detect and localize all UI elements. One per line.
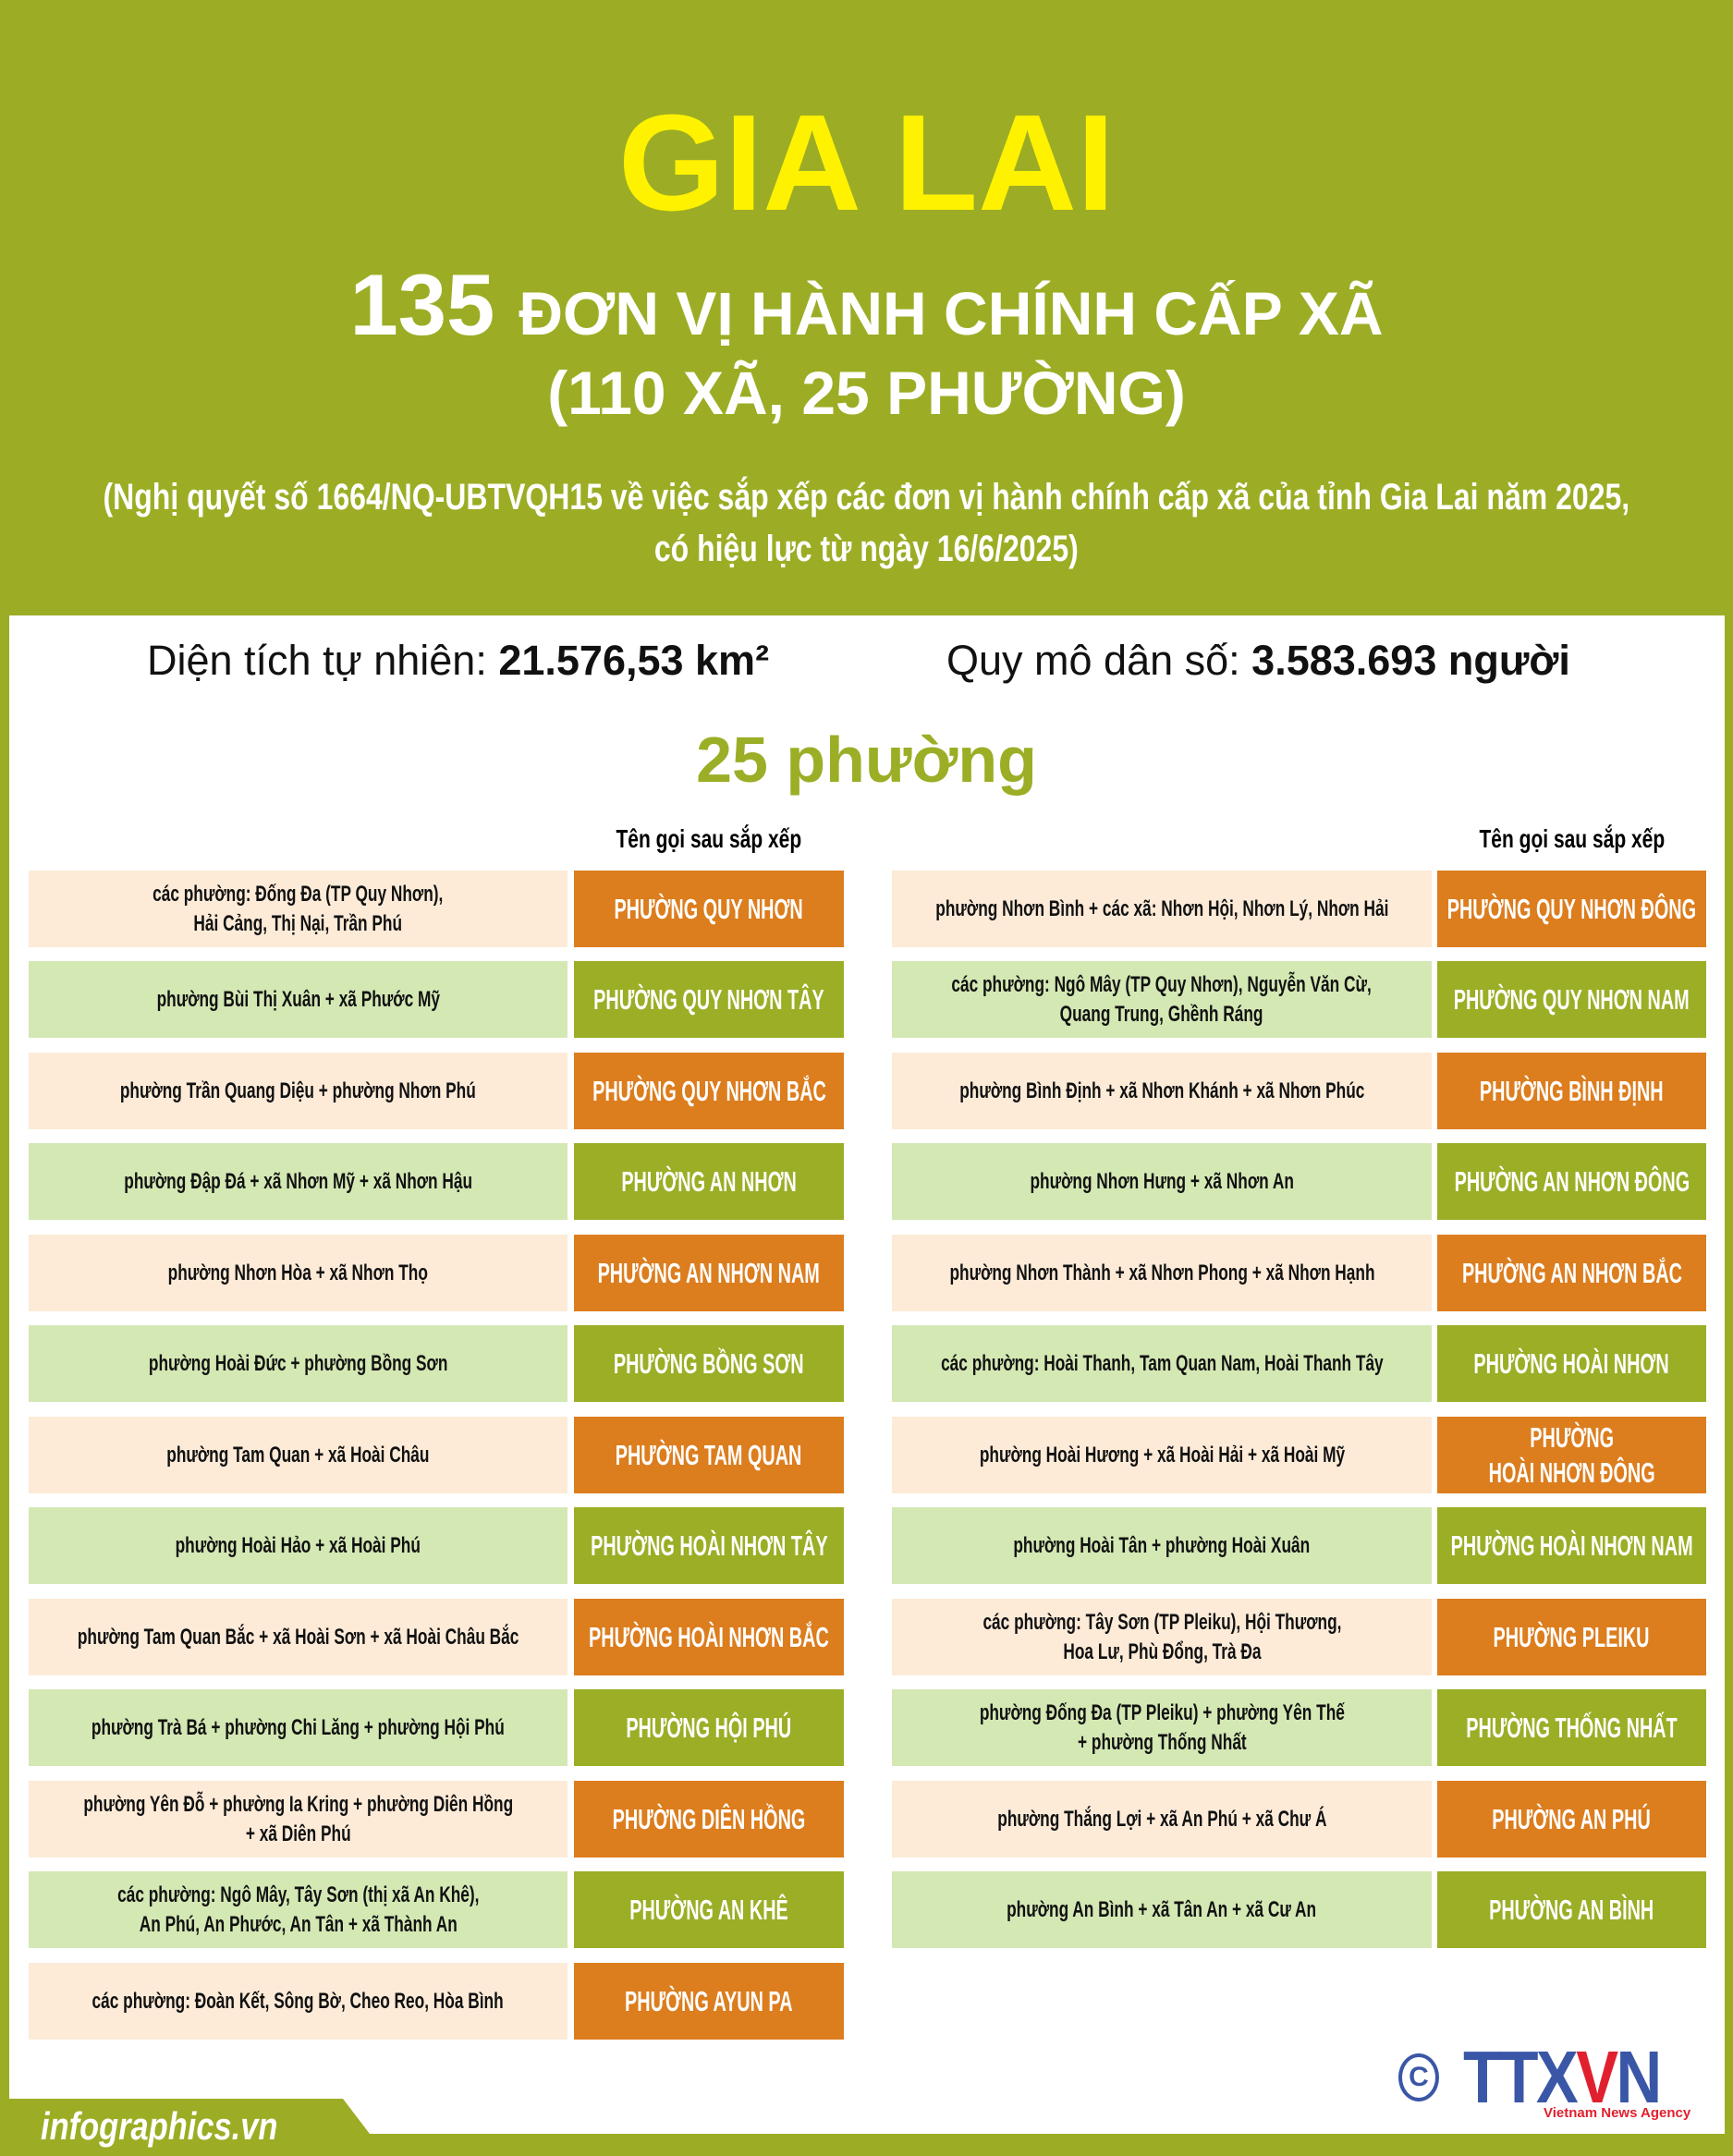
row L11 [29,1781,844,1858]
row R5: phường Nhơn Thành + xã Nhơn Phong + xã Nhơn Hạnh [949,1261,1374,1285]
row L7: PHƯỜNG TAM QUAN [616,1438,802,1471]
white panel [9,615,1725,2134]
row R10 [892,1689,1706,1766]
row L11: + xã Diên Phú [246,1821,350,1846]
subtitle: 135 units: 135 ĐƠN VỊ HÀNH CHÍNH CẤP XÃ [349,256,1384,353]
row L8 [29,1507,844,1584]
row R8: PHƯỜNG HOÀI NHƠN NAM [1451,1529,1692,1562]
row R1: PHƯỜNG QUY NHƠN ĐÔNG [1447,893,1696,924]
column header right: Tên gọi sau sắp xếp [1479,824,1665,853]
row L10: PHƯỜNG HỘI PHÚ [627,1711,791,1743]
stat: area: Diện tích tự nhiên: 21.576,53 km² [147,637,769,684]
row R12: PHƯỜNG AN BÌNH [1489,1893,1654,1926]
row L2: PHƯỜNG QUY NHƠN TÂY [593,983,824,1015]
row L1: PHƯỜNG QUY NHƠN [615,893,803,924]
row R11: phường Thắng Lợi + xã An Phú + xã Chư Á [997,1806,1326,1832]
row R9 [892,1599,1706,1675]
row L1: Hải Cảng, Thị Nại, Trần Phú [194,911,402,935]
row L12: An Phú, An Phước, An Tân + xã Thành An [139,1911,458,1937]
row R2: các phường: Ngô Mây (TP Quy Nhơn), Nguyễn Văn Cừ, [952,972,1372,996]
row L12 [29,1871,844,1948]
row L6 [29,1325,844,1402]
row R11: PHƯỜNG AN PHÚ [1493,1802,1651,1835]
resolution note [104,477,1629,569]
row R3: PHƯỜNG BÌNH ĐỊNH [1480,1074,1664,1107]
column header left: Tên gọi sau sắp xếp [616,824,801,853]
resolution note: có hiệu lực từ ngày 16/6/2025) [654,529,1079,569]
row R9: Hoa Lư, Phù Đổng, Trà Đa [1063,1639,1261,1663]
table: left column [29,871,844,2040]
row L6: phường Hoài Đức + phường Bồng Sơn [149,1351,447,1375]
row L1: các phường: Đống Đa (TP Quy Nhơn), [153,882,444,906]
row L9: phường Tam Quan Bắc + xã Hoài Sơn + xã Hoài Châu Bắc [78,1625,519,1649]
row L2: phường Bùi Thị Xuân + xã Phước Mỹ [156,987,440,1011]
row R7: PHƯỜNG [1530,1421,1614,1453]
heading: 25 phường: 25 phường [696,724,1037,796]
row L12: các phường: Ngô Mây, Tây Sơn (thị xã An Khê), [117,1882,479,1907]
title: GIA LAI [618,87,1115,239]
row L3: phường Trần Quang Diệu + phường Nhơn Phú [120,1078,476,1103]
row L4: phường Đập Đá + xã Nhơn Mỹ + xã Nhơn Hậu [124,1168,472,1194]
row R5: PHƯỜNG AN NHƠN BẮC [1461,1257,1682,1288]
row L2 [29,961,844,1038]
row L5: phường Nhơn Hòa + xã Nhơn Thọ [168,1261,428,1285]
row R10: PHƯỜNG THỐNG NHẤT [1466,1711,1678,1743]
row R3 [892,1053,1706,1129]
row L7: phường Tam Quan + xã Hoài Châu [166,1442,430,1468]
logo text: TTXVN [1463,2036,1660,2118]
row R9: PHƯỜNG PLEIKU [1494,1621,1650,1652]
row L13: PHƯỜNG AYUN PA [625,1985,793,2016]
row L13 [29,1963,844,2040]
row L10: phường Trà Bá + phường Chi Lăng + phường Hội Phú [92,1715,505,1739]
row L3 [29,1053,844,1129]
footer tab [9,2099,370,2134]
row R4: phường Nhơn Hưng + xã Nhơn An [1030,1168,1294,1194]
row L4 [29,1143,844,1220]
icon: copyright: C [1409,2062,1429,2092]
row L4: PHƯỜNG AN NHƠN [621,1164,797,1198]
row R9: các phường: Tây Sơn (TP Pleiku), Hội Thương, [982,1610,1341,1634]
row R6 [892,1325,1706,1402]
row R12 [892,1871,1706,1948]
row R8: phường Hoài Tân + phường Hoài Xuân [1014,1532,1310,1558]
row R11 [892,1781,1706,1858]
row L9 [29,1599,844,1675]
row R1: phường Nhơn Bình + các xã: Nhơn Hội, Nhơn Lý, Nhơn Hải [935,896,1388,920]
row R4 [892,1143,1706,1220]
row R10: + phường Thống Nhất [1078,1730,1246,1754]
row L11: PHƯỜNG DIÊN HỒNG [613,1802,805,1835]
row R12: phường An Bình + xã Tân An + xã Cư An [1007,1896,1316,1922]
row R2: Quang Trung, Ghềnh Ráng [1060,1002,1263,1026]
row R10: phường Đống Đa (TP Pleiku) + phường Yên Thế [979,1700,1345,1724]
row L1 [29,871,844,947]
row R1 [892,871,1706,947]
subtitle: 110 xã 25 phường: (110 XÃ, 25 PHƯỜNG) [547,359,1186,427]
row L5: PHƯỜNG AN NHƠN NAM [598,1257,820,1288]
logo: TTXVN [1398,2036,1691,2121]
icon: copyright [1398,2053,1439,2101]
row R2 [892,961,1706,1038]
row R2: PHƯỜNG QUY NHƠN NAM [1454,983,1690,1015]
logo tagline: Vietnam News Agency [1544,2105,1690,2121]
row L3: PHƯỜNG QUY NHƠN BẮC [592,1074,825,1107]
row L8: PHƯỜNG HOÀI NHƠN TÂY [591,1529,827,1562]
row L7 [29,1417,844,1493]
row L8: phường Hoài Hảo + xã Hoài Phú [176,1532,421,1558]
row L9: PHƯỜNG HOÀI NHƠN BẮC [589,1621,829,1652]
resolution note: (Nghị quyết số 1664/NQ-UBTVQH15 về việc sắp xếp các đơn vị hành chính cấp xã của tỉnh Gia Lai năm 2025, [104,477,1629,518]
row R7: phường Hoài Hương + xã Hoài Hải + xã Hoài Mỹ [979,1442,1345,1468]
row R7 [892,1417,1706,1493]
row R6: PHƯỜNG HOÀI NHƠN [1474,1347,1669,1379]
row L11: phường Yên Đỗ + phường Ia Kring + phường Diên Hồng [83,1791,513,1817]
row R3: phường Bình Định + xã Nhơn Khánh + xã Nhơn Phúc [959,1078,1364,1103]
row R7: HOÀI NHƠN ĐÔNG [1488,1456,1655,1488]
row L5 [29,1235,844,1311]
row L6: PHƯỜNG BỒNG SƠN [614,1347,804,1379]
row R4: PHƯỜNG AN NHƠN ĐÔNG [1454,1164,1690,1198]
row L10 [29,1689,844,1766]
row R5 [892,1235,1706,1311]
stat: population: Quy mô dân số: 3.583.693 người [946,637,1570,684]
row R8 [892,1507,1706,1584]
footer brand text: infographics.vn [41,2104,277,2148]
row L12: PHƯỜNG AN KHÊ [629,1893,788,1926]
row R6: các phường: Hoài Thanh, Tam Quan Nam, Hoài Thanh Tây [941,1351,1383,1375]
row L13: các phường: Đoàn Kết, Sông Bờ, Cheo Reo, Hòa Bình [92,1989,504,2013]
